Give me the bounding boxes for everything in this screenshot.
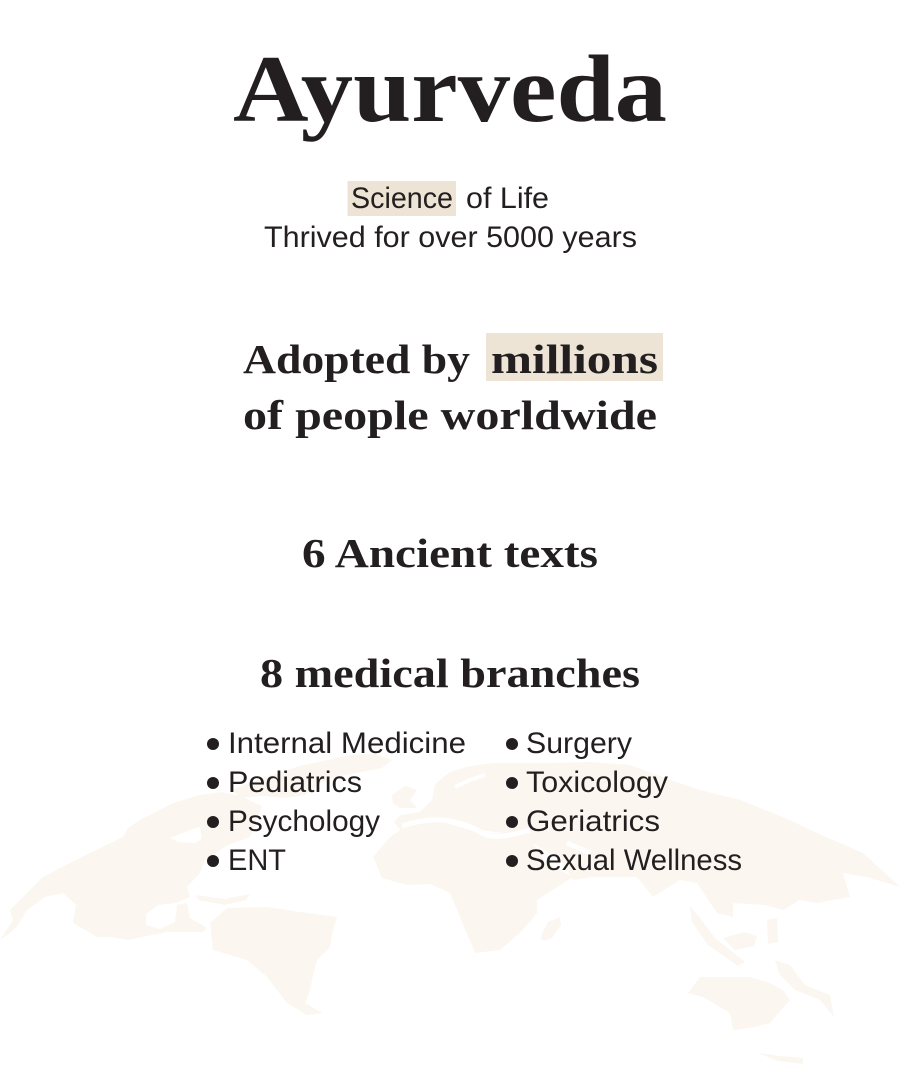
heading: adopted by millions <box>243 333 663 438</box>
text: science: Science <box>351 182 453 215</box>
subtitle: science of life <box>264 181 637 254</box>
map: Antarctic fragment <box>758 1053 803 1064</box>
map: Sumatra and Java <box>690 906 745 966</box>
map: Hudson Bay <box>170 827 202 843</box>
item: pediatrics: Pediatrics <box>228 766 362 799</box>
map: Greenland <box>232 754 392 798</box>
map: Africa <box>373 822 573 953</box>
map: Caspian Sea <box>567 843 590 853</box>
heading: 6 ancient texts: 6 Ancient texts <box>302 530 598 576</box>
map: New Guinea <box>775 960 834 1017</box>
list: medical branches right column <box>506 727 742 877</box>
map: Europe and Asia <box>394 762 900 917</box>
map: Australia <box>688 977 790 1030</box>
map: Madagascar <box>540 917 561 941</box>
map: Baltic Sea <box>455 775 485 787</box>
item: internal medicine: Internal Medicine <box>228 727 466 760</box>
item: sexual wellness: Sexual Wellness <box>526 844 742 877</box>
highlight: millions <box>486 333 663 381</box>
item: geriatrics: Geriatrics <box>526 805 660 838</box>
map: Caribbean islands <box>195 894 250 905</box>
item: toxicology: Toxicology <box>526 766 668 799</box>
item: surgery: Surgery <box>526 727 632 760</box>
map: North America <box>0 792 262 940</box>
map: Philippines <box>767 918 778 944</box>
text: millions: millions <box>491 336 658 382</box>
item: ENT: ENT <box>228 844 286 877</box>
title: Ayurveda <box>233 36 667 142</box>
text: of people worldwide: of people worldwide <box>243 392 657 438</box>
list: medical branches left column <box>207 727 466 877</box>
item: psychology: Psychology <box>228 805 380 838</box>
map: South America <box>210 907 337 1015</box>
text: adopted by: Adopted by <box>243 336 471 382</box>
map: Great Britain and Ireland <box>392 786 417 808</box>
map: Borneo <box>723 932 757 950</box>
map: Mediterranean <box>402 820 530 836</box>
text: of life: of Life <box>466 182 549 215</box>
heading: 8 medical branches: 8 medical branches <box>260 650 640 696</box>
highlight: science <box>348 181 456 216</box>
world map background <box>0 754 900 1064</box>
text: thrived for over 5000 years: Thrived for over 5000 years <box>264 221 637 254</box>
